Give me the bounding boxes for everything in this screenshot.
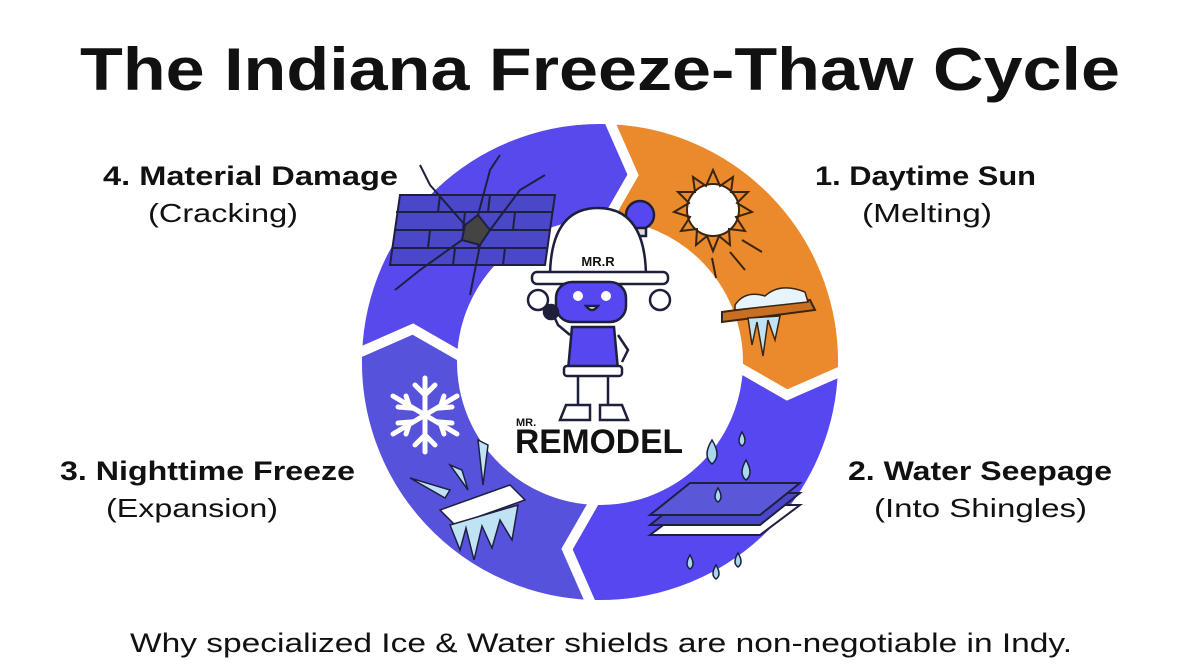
icon: snowflake (393, 378, 457, 452)
logo: MR. (516, 417, 536, 429)
segment 4: material damage (357, 119, 633, 357)
segment 3: nighttime freeze (357, 329, 595, 605)
icon: lightbulb (626, 201, 654, 236)
segment 1: daytime sun (605, 119, 843, 395)
label 1 (815, 161, 1036, 228)
label 4: (Cracking) (148, 198, 298, 228)
icon: shingles with drops (650, 432, 800, 579)
icon: melting roof edge (722, 288, 815, 356)
mascot: Mr. R robot (528, 201, 670, 420)
label 2 (848, 456, 1112, 523)
label 1: 1. Daytime Sun (815, 161, 1036, 191)
label 3 (60, 456, 355, 523)
logo: REMODEL (515, 423, 683, 461)
icon: cracked bricks (390, 155, 555, 295)
label 3: 3. Nighttime Freeze (60, 456, 355, 486)
title: The Indiana Freeze-Thaw Cycle (80, 36, 1120, 103)
mascot: Mr. R robot: MR.R (581, 254, 615, 269)
label 2: 2. Water Seepage (848, 456, 1112, 486)
icon: sun (674, 170, 762, 278)
label 1: (Melting) (862, 198, 992, 228)
icon: ice crystals (410, 440, 525, 560)
segment 2: water seepage (567, 367, 843, 605)
footer caption: Why specialized Ice & Water shields are non-negotiable in Indy. (130, 628, 1072, 658)
label 3: (Expansion) (106, 493, 278, 523)
label 4 (103, 161, 398, 228)
label 4: 4. Material Damage (103, 161, 398, 191)
cycle ring (357, 119, 843, 605)
label 2: (Into Shingles) (874, 493, 1087, 523)
